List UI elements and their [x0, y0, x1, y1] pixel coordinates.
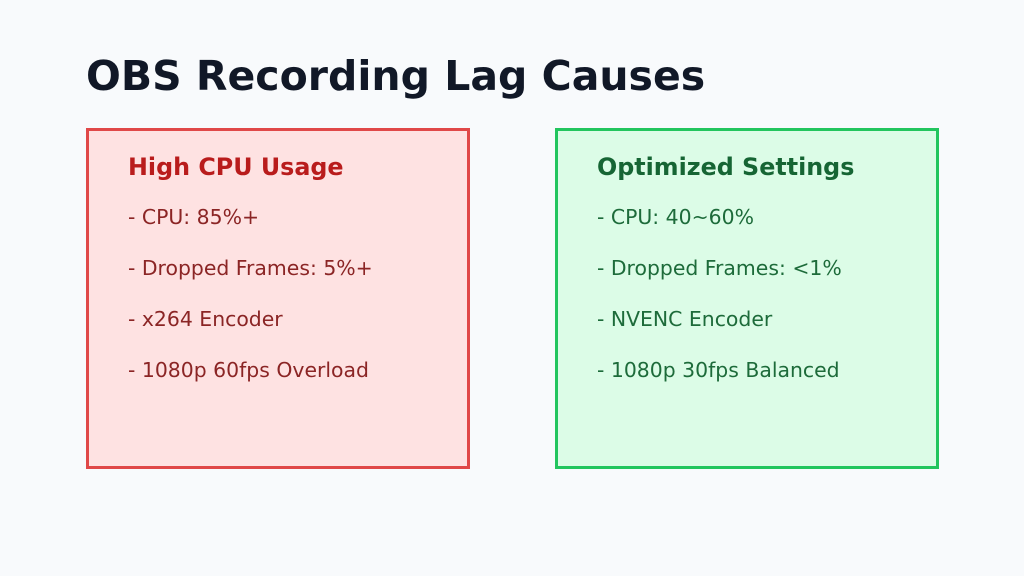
list: cause items: - 1080p 60fps Overload: [128, 358, 369, 382]
list: settings items: - Dropped Frames: <1%: [597, 256, 842, 280]
list: cause items: - CPU: 85%+: [128, 205, 259, 229]
list: settings items: - NVENC Encoder: [597, 307, 773, 331]
panel: high CPU usage: [88, 130, 468, 468]
list: cause items: [128, 205, 373, 382]
list: settings items: [597, 205, 842, 382]
heading: optimized settings: Optimized Settings: [597, 153, 854, 181]
list: settings items: - 1080p 30fps Balanced: [597, 358, 840, 382]
heading: high CPU usage: High CPU Usage: [128, 153, 344, 181]
title: OBS Recording Lag Causes: [86, 52, 705, 100]
panel: optimized settings: [556, 130, 938, 468]
list: cause items: - Dropped Frames: 5%+: [128, 256, 373, 280]
list: settings items: - CPU: 40~60%: [597, 205, 754, 229]
list: cause items: - x264 Encoder: [128, 307, 283, 331]
